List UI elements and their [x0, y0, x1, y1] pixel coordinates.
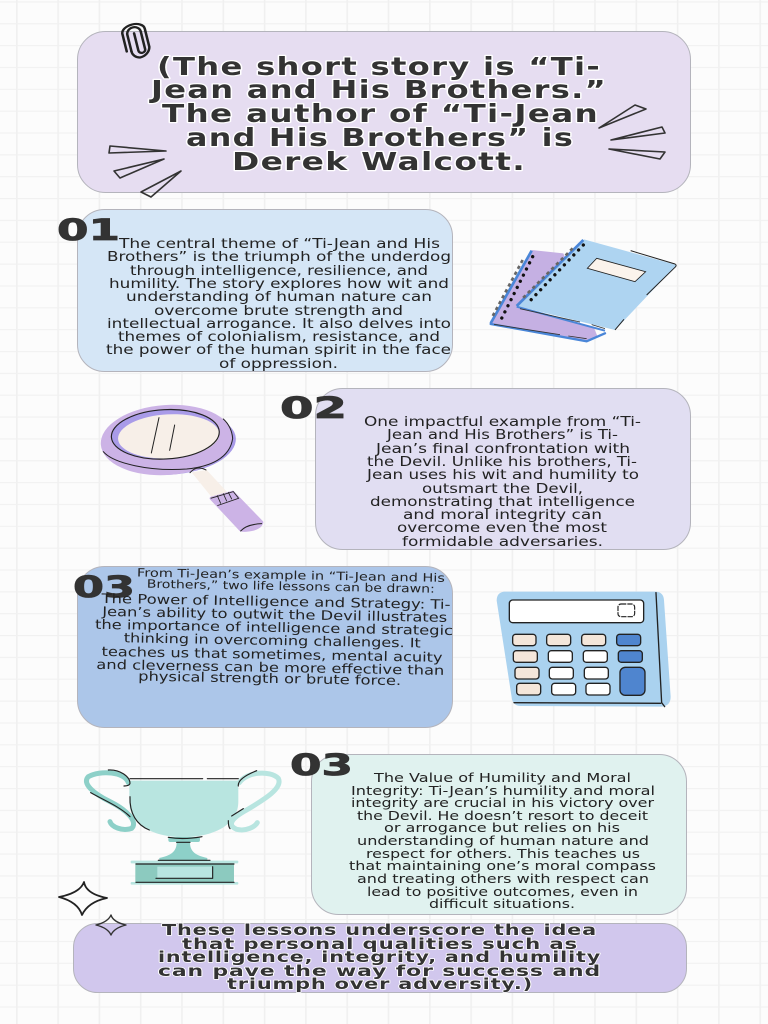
panel: central theme: [57, 210, 452, 372]
conclusion text: These lessons underscore the idea: [162, 921, 597, 939]
text block: The Value of Humility and Moral: [373, 770, 631, 785]
text block: Integrity: Ti-Jean’s humility and moral: [351, 783, 655, 798]
title: (The short story is “Ti-: [157, 52, 601, 81]
card: [312, 754, 686, 914]
text block: The Power of Intelligence and Strategy: Ti-: [100, 592, 451, 613]
number 01: 01: [57, 213, 120, 247]
icon: burst lines left: [109, 146, 181, 197]
panel: life lesson two: [290, 748, 686, 914]
text block: [364, 415, 641, 550]
panel: impactful example: [280, 388, 690, 550]
text block: difficult situations.: [429, 896, 575, 911]
panel: title: [78, 22, 690, 197]
text block: outsmart the Devil,: [422, 482, 583, 497]
panel: conclusion: [74, 921, 686, 993]
conclusion text: intelligence, integrity, and humility: [158, 948, 601, 966]
conclusion text: that personal qualities such as: [182, 935, 578, 953]
text block: the power of the human spirit in the face: [106, 343, 451, 358]
card: [78, 210, 452, 372]
text block: One impactful example from “Ti-: [364, 415, 641, 430]
title card: [78, 32, 690, 192]
text block: understanding of human nature can: [126, 290, 432, 305]
text block: demonstrating that intelligence: [370, 495, 635, 510]
text block: [349, 770, 656, 911]
text block: [94, 565, 454, 690]
card: [78, 566, 452, 728]
icon: notebooks: [490, 239, 677, 342]
text block: integrity are crucial in his victory over: [351, 795, 655, 810]
panel: life lesson one: [73, 565, 454, 728]
text block: formidable adversaries.: [402, 535, 603, 550]
text block: [106, 237, 451, 372]
text block: Jean’s ability to outwit the Devil illustrates: [101, 605, 448, 626]
text block: the Devil. Unlike his brothers, Ti-: [367, 455, 637, 470]
text block: through intelligence, resilience, and: [130, 264, 428, 279]
icon: magnifying glass: [98, 400, 262, 531]
text block: and cleverness can be more effective than: [96, 658, 444, 679]
title: Jean and His Brothers.”: [148, 75, 607, 104]
text block: overcome even the most: [397, 521, 607, 536]
text block: lead to positive outcomes, even in: [367, 884, 638, 899]
text block: physical strength or brute force.: [138, 670, 401, 689]
icon: calculator: [497, 592, 671, 707]
number 02: 02: [280, 391, 347, 425]
text block: of oppression.: [219, 357, 338, 372]
conclusion text: triumph over adversity.): [227, 975, 533, 993]
text block: Brothers” is the triumph of the underdog: [107, 250, 451, 265]
title: The author of “Ti-Jean: [162, 99, 599, 128]
text block: From Ti-Jean’s example in “Ti-Jean and His: [137, 566, 445, 585]
text block: The central theme of “Ti-Jean and His: [118, 237, 440, 252]
text block: themes of colonialism, resistance, and: [118, 330, 440, 345]
icon: trophy: [86, 770, 279, 885]
text block: the Devil. He doesn’t resort to deceit: [357, 808, 648, 823]
text block: respect for others. This teaches us: [366, 846, 640, 861]
text block: teaches us that sometimes, mental acuity: [101, 645, 443, 666]
text block: and moral integrity can: [403, 508, 602, 523]
text block: that maintaining one’s moral compass: [349, 858, 656, 873]
text block: Jean and His Brothers” is Ti-: [386, 428, 618, 443]
number 03: 03: [290, 748, 353, 782]
text block: Jean uses his wit and humility to: [366, 468, 639, 483]
card: [316, 388, 690, 550]
text block: the importance of intelligence and strategic: [95, 618, 453, 639]
text block: Jean’s final confrontation with: [375, 442, 630, 457]
text block: or arrogance but relies on his: [384, 820, 620, 835]
icon: burst lines right: [599, 105, 665, 159]
icon: large sparkle: [59, 882, 107, 915]
title: Derek Walcott.: [232, 147, 526, 176]
text block: thinking in overcoming challenges. It: [124, 631, 421, 651]
card: [74, 924, 686, 992]
title: [148, 52, 607, 176]
icon: paperclip: [121, 22, 151, 60]
conclusion text: can pave the way for success and: [158, 962, 601, 980]
number 03: 03: [73, 570, 135, 604]
text block: overcome brute strength and: [154, 304, 403, 319]
title: and His Brothers” is: [186, 123, 574, 152]
text block: Brothers,” two life lessons can be drawn:: [147, 577, 435, 596]
text block: and treating others with respect can: [357, 871, 649, 886]
text block: humility. The story explores how wit and: [109, 277, 449, 292]
icon: small sparkle: [96, 915, 126, 935]
conclusion text: [158, 921, 601, 993]
text block: understanding of human nature and: [357, 833, 649, 848]
text block: intellectual arrogance. It also delves into: [107, 317, 451, 332]
